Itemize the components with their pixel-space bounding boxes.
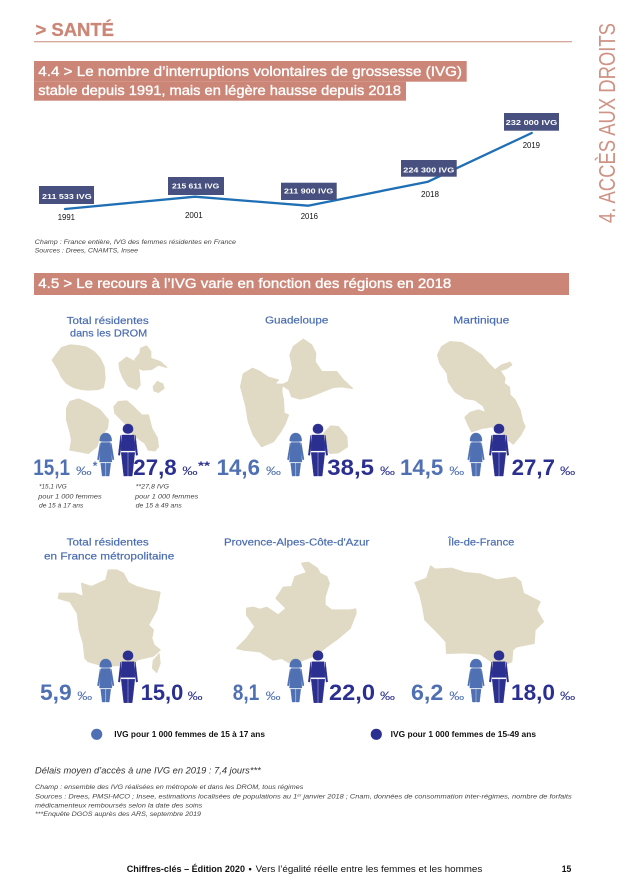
- map: DROM territories: [52, 345, 167, 453]
- data label 2016: [281, 183, 337, 221]
- source notes: ***Enquête DGOS auprès des ARS, septembre 2019: [35, 811, 201, 818]
- data label 2001: [168, 177, 224, 220]
- footnote: 15-17: [37, 484, 103, 509]
- panel: 4.5 title: 4.5 > Le recours à l’IVG varie en fonction des régions en 2018: [38, 276, 451, 291]
- value: 15-49: 27,8: [133, 455, 177, 480]
- value: 15-17: ‰: [76, 464, 92, 478]
- data label 2019: 232 000 IVG: [506, 118, 557, 127]
- panel: 4.4 title: stable depuis 1991, mais en légère hausse depuis 2018: [38, 83, 401, 98]
- value: 15-17: 14,5: [400, 455, 443, 480]
- chart source notes: Champ : France entière, IVG des femmes résidentes en France: [35, 239, 236, 246]
- panel: 4.5 title: [34, 273, 569, 295]
- heading: Île-de-France: [447, 536, 514, 549]
- map: PACA: [237, 562, 356, 665]
- footnote: 15-49: [134, 484, 199, 509]
- panel: Île-de-France: [411, 536, 575, 705]
- footer: Vers l’égalité réelle entre les femmes et les hommes: [256, 864, 483, 874]
- value: 15-49: 38,5: [327, 455, 374, 480]
- value: 15-17: ‰: [449, 689, 464, 703]
- source notes: Sources : Drees, PMSI-MCO ; Insee, estimations localisées de populations au 1: [35, 793, 261, 800]
- value: 15-17: ‰: [449, 464, 464, 478]
- value: 15-17: 8,1: [233, 680, 259, 705]
- legend item: 15-49: IVG pour 1 000 femmes de 15-49 ans: [391, 729, 536, 739]
- value: 15-17: [233, 680, 281, 705]
- icon: girl: [97, 659, 114, 702]
- value: 15-49: 15,0: [141, 680, 183, 705]
- line chart: IVG 1991-2019: [39, 113, 559, 222]
- map: Guadeloupe: [241, 339, 352, 453]
- heading: Guadeloupe: [265, 314, 328, 326]
- value: 15-49: 18,0: [511, 680, 555, 705]
- map: Île-de-France: [415, 566, 543, 667]
- data label 2001: 215 611 IVG: [172, 182, 219, 190]
- data label 2019: [504, 113, 559, 150]
- footnote: 15-17: de 15 à 17 ans: [39, 502, 84, 509]
- data label 2001: 2001: [185, 211, 203, 220]
- panel: Provence-Alpes-Côte-d'Azur: [224, 537, 395, 705]
- value: 15-49: 27,7: [512, 455, 555, 480]
- heading: en France métropolitaine: [44, 550, 174, 562]
- footnote: 15-17: *15,1 IVG: [39, 484, 67, 491]
- source notes: er: [297, 792, 302, 797]
- icon: woman: [118, 424, 138, 476]
- panel: total DROM: [33, 315, 210, 509]
- value: 15-17: [411, 680, 464, 705]
- value: 15-49: [133, 455, 210, 480]
- footer: •: [248, 864, 252, 874]
- chart source notes: Sources : Drees, CNAMTS, Insee: [35, 248, 138, 255]
- footer: Chiffres-clés – Édition 2020: [127, 864, 245, 874]
- value: 15-17: ‰: [77, 689, 92, 703]
- value: 15-49: ‰: [560, 464, 575, 478]
- value: 15-17: [40, 680, 92, 705]
- footnote: 15-49: **27,8 IVG: [136, 484, 169, 491]
- icon: woman: [489, 651, 509, 703]
- value: 15-49: [511, 680, 575, 705]
- value: 15-49: 22,0: [329, 680, 375, 705]
- value: 15-49: ‰: [380, 464, 395, 478]
- data label 1991: [39, 186, 94, 222]
- data label 1991: 1991: [58, 213, 76, 222]
- source notes: médicamenteux remboursés selon la date des soins: [35, 802, 203, 809]
- icon: woman: [308, 424, 328, 476]
- footer: [127, 864, 571, 874]
- icon: girl: [97, 433, 114, 476]
- heading: Martinique: [453, 314, 509, 326]
- icon: woman: [308, 651, 328, 703]
- value: 15-49: **: [198, 459, 210, 473]
- value: 15-49: ‰: [560, 689, 575, 703]
- legend: [91, 729, 536, 740]
- map: Martinique: [438, 342, 525, 444]
- legend item: 15-17: IVG pour 1 000 femmes de 15 à 17 ans: [114, 729, 265, 739]
- heading: Provence-Alpes-Côte-d'Azur: [224, 537, 370, 549]
- footnote: 15-17: pour 1 000 femmes: [37, 494, 103, 501]
- value: 15-49: [327, 455, 395, 480]
- data label 1991: 211 533 IVG: [42, 192, 92, 201]
- data label 2018: [401, 160, 457, 199]
- panel: 4.4 title: 4.4 > Le nombre d’interruptions volontaires de grossesse (IVG): [38, 64, 462, 79]
- data label 2018: 2018: [421, 190, 440, 199]
- value: 15-49: [141, 680, 203, 705]
- map: France: [58, 570, 160, 672]
- heading: Total résidentes: [67, 315, 149, 327]
- section heading: santé: > SANTÉ: [36, 19, 114, 40]
- value: 15-17: [33, 455, 98, 480]
- data label 2016: 2016: [301, 212, 319, 221]
- heading: Total résidentes: [67, 537, 149, 549]
- value: 15-17: ‰: [266, 464, 281, 478]
- value: 15-49: [329, 680, 395, 705]
- value: 15-17: *: [93, 459, 98, 473]
- icon: girl: [468, 659, 484, 702]
- value: 15-49: ‰: [188, 689, 203, 703]
- chart source notes: [35, 239, 236, 255]
- source notes: Champ : ensemble des IVG réalisées en métropole et dans les DROM, tous régimes: [35, 784, 304, 791]
- value: 15-49: ‰: [182, 464, 198, 478]
- panel: Martinique: [400, 314, 575, 480]
- icon: girl: [287, 433, 304, 476]
- icon: girl: [287, 659, 304, 702]
- value: 15-17: 14,6: [217, 455, 260, 480]
- value: 15-17: 5,9: [40, 680, 72, 705]
- panel: France métropolitaine: [40, 537, 203, 705]
- data label 2018: 224 300 IVG: [403, 165, 454, 174]
- panel: Guadeloupe: [217, 314, 395, 480]
- icon: woman: [118, 651, 138, 703]
- source notes: janvier 2018 ; Cnam, données de consommation inter-régimes, nombre de forfaits: [301, 793, 573, 800]
- footnote: 15-49: pour 1 000 femmes: [134, 494, 199, 501]
- trend line: [65, 133, 532, 209]
- value: 15-17: 6,2: [411, 680, 443, 705]
- value: 15-49: ‰: [380, 689, 395, 703]
- footer: 15: [562, 864, 571, 874]
- footnote: 15-49: de 15 à 49 ans: [136, 502, 183, 509]
- value: 15-17: 15,1: [33, 455, 70, 480]
- heading: dans les DROM: [70, 328, 147, 340]
- value: 15-49: [512, 455, 575, 480]
- icon: woman: [489, 424, 509, 476]
- value: 15-17: ‰: [266, 689, 281, 703]
- icon: girl: [468, 433, 484, 476]
- value: 15-17: [400, 455, 464, 480]
- heading: [44, 537, 174, 562]
- heading: [67, 315, 149, 340]
- data label 2019: 2019: [523, 141, 541, 150]
- panel: 4.4 title: [34, 61, 467, 101]
- text: average access delay: Délais moyen d’accès à une IVG en 2019 : 7,4 jours***: [35, 765, 261, 775]
- source notes: [35, 784, 573, 818]
- value: 15-17: [217, 455, 281, 480]
- data label 2016: 211 900 IVG: [284, 186, 333, 195]
